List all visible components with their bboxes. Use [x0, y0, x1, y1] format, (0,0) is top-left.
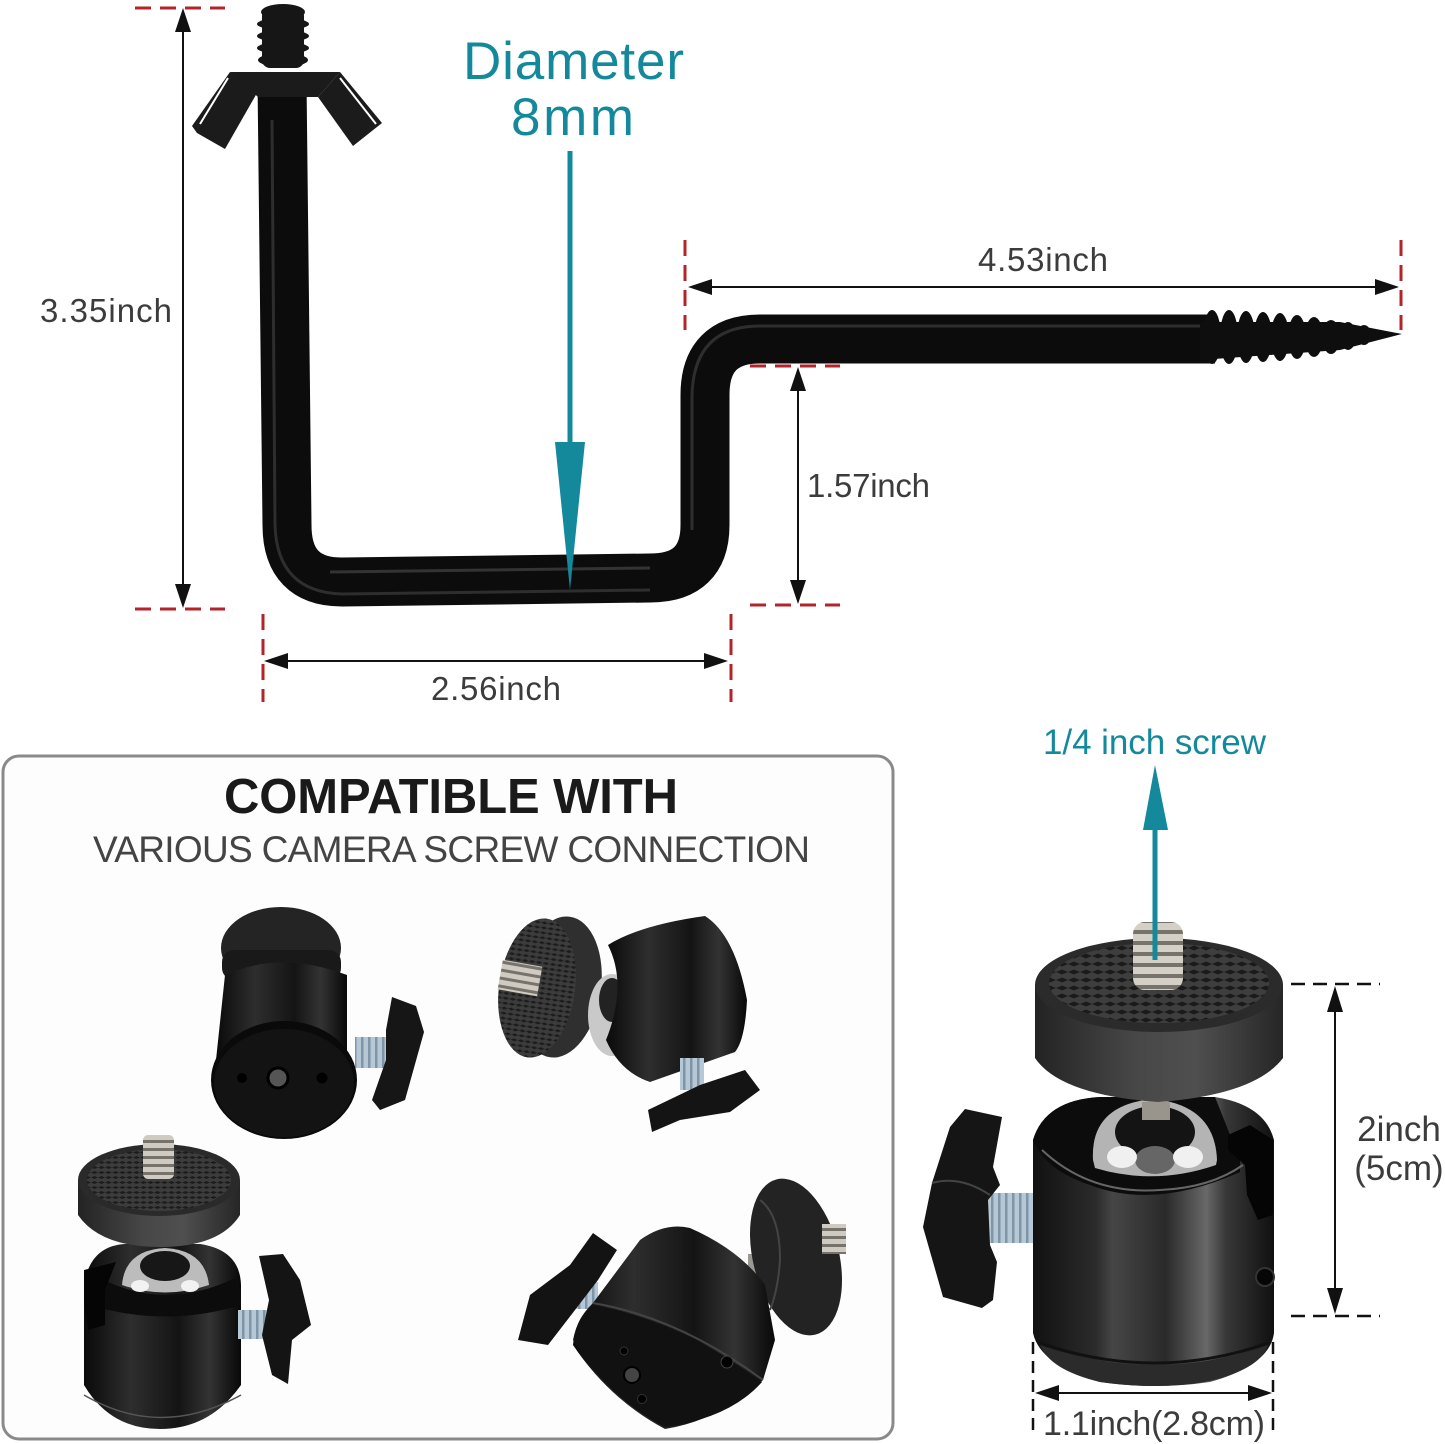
dimension: 2inch (5cm): (5cm) — [1354, 1149, 1444, 1188]
panel: compatible with — [3, 756, 893, 1439]
screw tip — [1200, 310, 1402, 364]
dimension: 2.56inch — [264, 653, 728, 707]
top plate — [1035, 938, 1283, 1032]
dimension: 4.53inch: 4.53inch — [978, 241, 1108, 278]
top thread — [257, 4, 309, 68]
main ball head — [923, 922, 1283, 1386]
top screw — [1133, 922, 1183, 990]
callout: 1/4 inch screw: 1/4 inch screw — [1043, 723, 1267, 762]
red dashed guides — [135, 8, 1401, 702]
dimension: 3.35inch — [40, 8, 191, 608]
ball head: upside-down — [211, 907, 424, 1139]
top lip — [1033, 1097, 1240, 1195]
ball head: tilted left — [490, 911, 760, 1132]
ball head: upright — [78, 1135, 311, 1429]
dimension: 2inch (5cm) — [1291, 984, 1444, 1316]
ball head: lying right — [518, 1169, 857, 1429]
dimension: 1.1inch (2.8cm): 1.1inch(2.8cm) — [1043, 1405, 1265, 1443]
dimension: 2inch (5cm): 2inch — [1357, 1110, 1441, 1149]
right slot — [1228, 1125, 1273, 1220]
dimension: 1.57inch: 1.57inch — [807, 467, 930, 504]
dimension: 1.1inch (2.8cm) — [1033, 1342, 1273, 1443]
panel subheading: VARIOUS CAMERA SCREW CONNECTION — [93, 829, 810, 870]
dimension: 4.53inch — [688, 241, 1399, 295]
dimension: 1.57inch — [790, 367, 930, 604]
body — [1033, 1097, 1274, 1386]
diameter callout: Diameter — [463, 32, 684, 91]
side knob bolt — [988, 1193, 1035, 1243]
top plate side — [1035, 985, 1283, 1102]
panel heading: COMPATIBLE WITH — [224, 770, 678, 824]
diameter callout — [463, 32, 684, 590]
wing nut — [192, 72, 382, 149]
hook rod — [192, 4, 1402, 594]
side knob — [923, 1109, 1002, 1308]
dimension: 2.56inch: 2.56inch — [431, 670, 561, 707]
chrome ball — [1093, 1099, 1217, 1176]
dimension: 3.35inch: 3.35inch — [40, 292, 172, 329]
diameter callout: 8mm — [511, 88, 634, 147]
callout: 1/4 inch screw — [1043, 723, 1267, 960]
